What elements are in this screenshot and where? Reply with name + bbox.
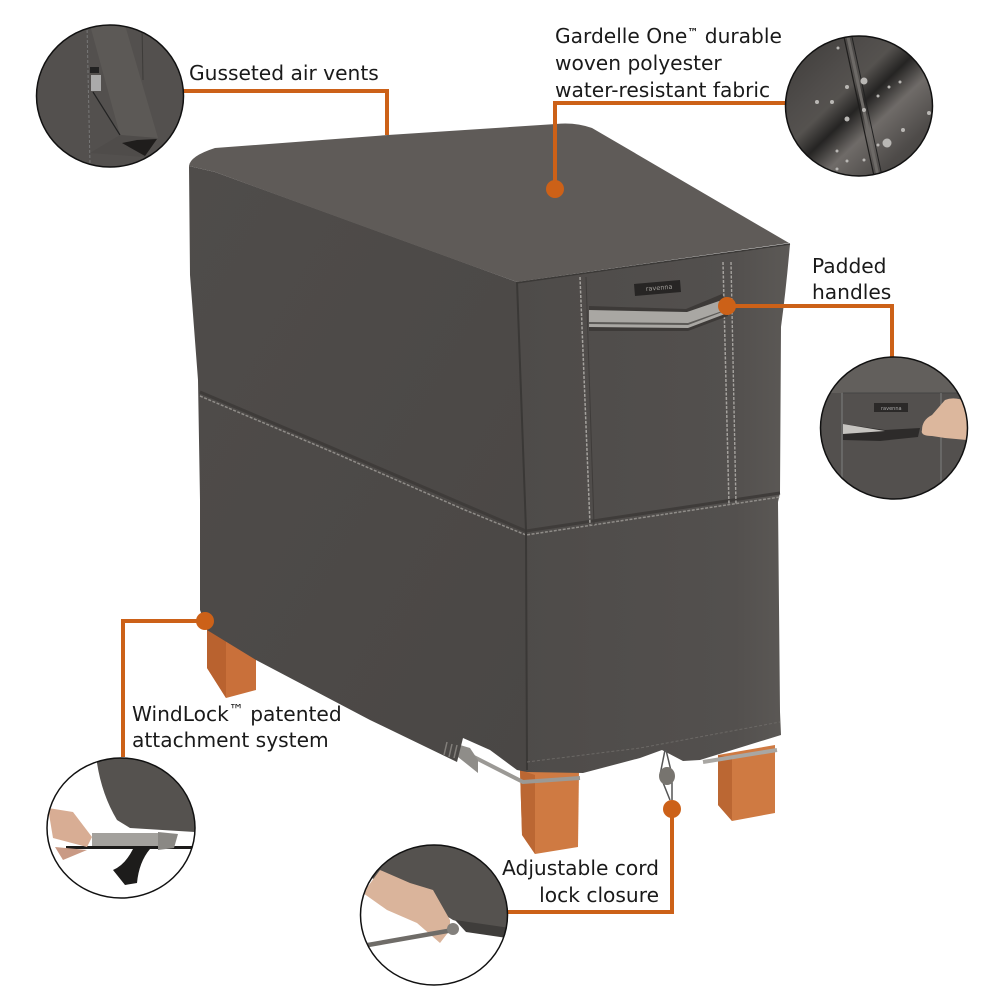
detail circle outline: fabric	[786, 36, 932, 176]
detail circle outline: WindLock	[47, 758, 195, 898]
detail circle: gusseted air vents	[36, 25, 184, 168]
cover: padded handle	[589, 294, 728, 331]
label: fabric: durable	[698, 24, 782, 48]
label: padded handles: handles	[812, 280, 891, 304]
label: WindLock: patented	[244, 702, 342, 726]
label: fabric: ™	[687, 26, 698, 39]
cover: brand label: ravenna	[645, 283, 673, 293]
cover: strap under hem	[458, 745, 777, 782]
detail circle: padded handles: ravenna	[881, 406, 902, 412]
detail circle: padded handles	[820, 357, 968, 499]
cover: seams and stitching	[200, 244, 790, 770]
callout line: WindLock	[123, 612, 214, 757]
detail circle outline: handles	[820, 357, 968, 499]
cover: front panel	[516, 244, 790, 773]
wooden table legs	[207, 625, 775, 854]
label: fabric: water-resistant fabric	[555, 78, 770, 102]
cover: brand label	[634, 280, 681, 296]
cover: top panel	[189, 124, 789, 282]
label: fabric: Gardelle One	[555, 24, 687, 48]
label: WindLock: attachment system	[132, 728, 329, 752]
detail circle: cord lock	[364, 846, 507, 947]
cover: left side panel	[189, 166, 527, 772]
label: padded handles: Padded	[812, 254, 886, 278]
callout line: fabric	[546, 103, 785, 198]
detail circle: fabric with water droplets	[785, 35, 934, 177]
label: fabric: woven polyester	[555, 51, 722, 75]
callout line: cord lock	[508, 800, 681, 912]
label: WindLock: ™	[229, 701, 244, 719]
callout line: padded handles	[718, 297, 892, 358]
label: cord lock: Adjustable cord	[502, 856, 659, 880]
callout line: gusseted air vents	[183, 91, 387, 135]
detail circle outline: cord lock	[360, 845, 508, 985]
cover: cord lock	[659, 750, 675, 800]
label: gusseted air vents: Gusseted air vents	[189, 61, 379, 85]
detail circle outline: vents	[36, 25, 184, 167]
label: WindLock: WindLock	[132, 702, 229, 726]
label: cord lock: lock closure	[539, 883, 659, 907]
detail circle: WindLock buckle	[49, 758, 194, 885]
